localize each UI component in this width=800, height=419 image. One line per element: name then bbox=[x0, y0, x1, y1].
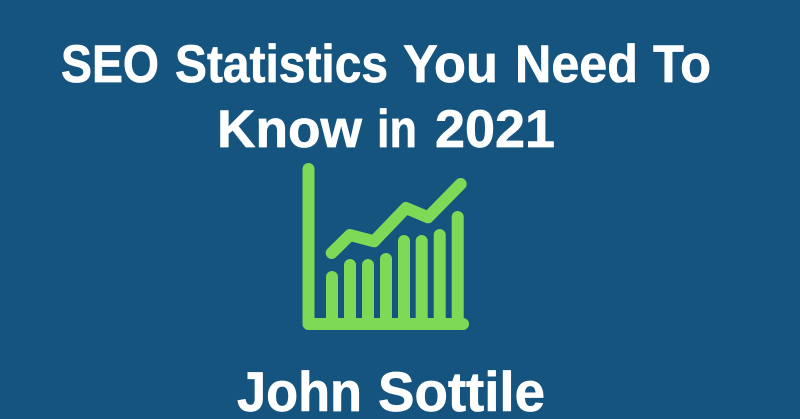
chart bars bbox=[332, 217, 458, 324]
title: in bbox=[377, 100, 417, 159]
title: Need bbox=[515, 35, 638, 94]
icon: rising bar and line chart bbox=[308, 169, 463, 324]
title: To bbox=[653, 35, 711, 94]
author name bbox=[237, 360, 545, 419]
chart trend line bbox=[332, 184, 461, 253]
title bbox=[61, 35, 711, 159]
title: Statistics bbox=[175, 35, 388, 94]
title: SEO bbox=[61, 35, 159, 94]
chart axes bbox=[308, 169, 463, 324]
title: 2021 bbox=[435, 100, 555, 159]
title: You bbox=[403, 35, 498, 94]
title: Know bbox=[217, 100, 363, 159]
